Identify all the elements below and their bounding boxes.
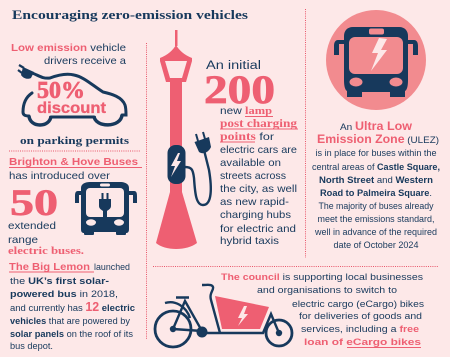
text: lamp post charging description: for electric and [220, 223, 296, 235]
text: ULEZ description: central areas of Castle Square, [312, 162, 440, 173]
text: Big Lemon description: solar panels on the roof of its [10, 329, 133, 340]
text: council description: and organisations to switch to [257, 285, 397, 296]
text: ULEZ description: date of October 2024 [334, 240, 419, 251]
title: Encouraging zero-emission vehicles [12, 7, 248, 22]
text: ULEZ description: The majority of buses already [318, 201, 434, 212]
text: Big Lemon description [10, 262, 136, 352]
text: lamp post charging description: charging hubs [220, 209, 291, 221]
text: ULEZ description: An Ultra Low [340, 119, 413, 133]
text: on parking permits: on parking permits [20, 136, 129, 147]
text: Big Lemon description: and currently has 12 electric [10, 300, 136, 314]
heading: The Big Lemon: The Big Lemon [9, 261, 90, 273]
panel: parking discount [11, 42, 129, 147]
text: lamp post charging description: electric cars are [220, 144, 297, 156]
stat: 50% discount: 50% [37, 78, 85, 104]
stat: 50% discount [37, 78, 106, 117]
text: an initial: An initial [206, 60, 261, 72]
text: ULEZ description: meet the emissions standard, [318, 214, 434, 225]
heading: Brighton and Hove Buses: Brighton & Hove Buses [9, 156, 138, 168]
text: ULEZ description: is in place for buses within the [316, 148, 436, 159]
panel: Brighton and Hove Buses [8, 156, 142, 257]
text: lamp post charging description [220, 105, 298, 247]
text: lamp post charging description: points for [220, 131, 275, 143]
panel: The Big Lemon [9, 261, 136, 352]
text: council description: services, including a free [301, 324, 419, 335]
text: lamp post charging description: available on [220, 157, 281, 169]
text: lamp post charging description: new lamp [220, 105, 272, 117]
text: council description: The council is supporting local businesses [221, 272, 423, 283]
text: council description: electric cargo (eCargo) bikes [292, 299, 424, 310]
text: extended range electric buses: electric buses. [8, 245, 84, 257]
text: extended range electric buses: range [8, 234, 38, 246]
text: ULEZ description: Emission Zone (ULEZ) [317, 132, 439, 146]
text: lamp post charging description: hybrid taxis [220, 235, 279, 247]
text: Big Lemon description: powered bus in 2018, [10, 289, 118, 300]
text: council description: for deliveries of goods and [299, 311, 422, 322]
text: lamp post charging description: post charging [220, 118, 297, 130]
text: council description [221, 272, 424, 348]
stat: 200: 200 [204, 67, 275, 112]
text: Big Lemon description: the UK’s first solar- [10, 276, 109, 287]
icon: electric cargo bike [155, 285, 292, 347]
text: Big Lemon description: launched [94, 262, 130, 273]
icon: lamp post charger [156, 30, 211, 249]
text: ULEZ description: North Street and Western [319, 175, 433, 186]
icon: car with plug [18, 65, 126, 125]
text: low emission intro: drivers receive a [44, 55, 126, 67]
text: ULEZ description: Road to Palmeira Square. [320, 188, 432, 199]
stat: 50% discount: discount [37, 100, 106, 117]
text: low emission intro [11, 42, 126, 67]
icon: electric bus in circle [326, 10, 426, 110]
panel: Ultra Low Emission Zone [312, 10, 440, 251]
text: lamp post charging description: the city, as well [220, 183, 297, 195]
text: lamp post charging description: streets across [220, 170, 286, 182]
text: extended range electric buses [8, 220, 84, 257]
text: ULEZ description [312, 119, 440, 251]
text: lamp post charging description: as new rapid- [220, 196, 290, 208]
text: council description: loan of eCargo bikes [304, 337, 421, 348]
icon: electric bus with plug [75, 182, 137, 235]
text: low emission intro: Low emission vehicle [11, 42, 126, 54]
text: Big Lemon description: bus depot. [10, 341, 53, 352]
panel: eCargo bikes [155, 272, 424, 348]
panel: lamp post charging [156, 30, 298, 249]
text: has introduced over: has introduced over [9, 170, 111, 182]
text: Big Lemon description: vehicles that are powered by [10, 316, 130, 327]
stat: 50: 50 [10, 183, 58, 224]
text: ULEZ description: well in advance of the required [314, 227, 437, 238]
text: extended range electric buses: extended [8, 220, 56, 232]
